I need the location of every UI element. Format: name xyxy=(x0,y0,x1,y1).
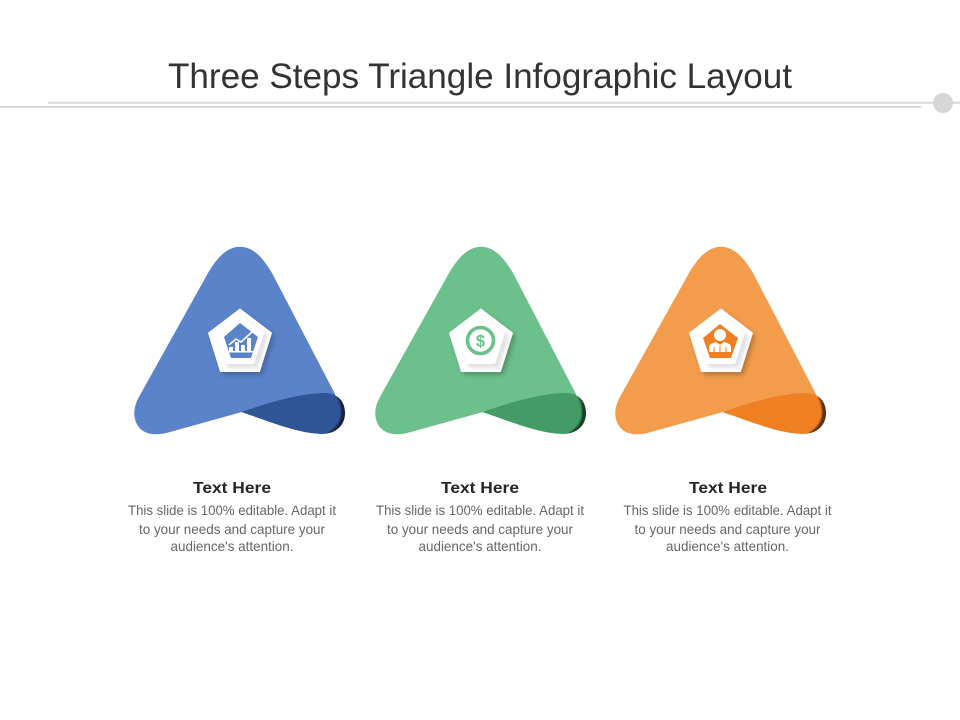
panel: step 2 green triangle xyxy=(375,247,589,436)
text block: step 2: Text Here xyxy=(441,480,519,497)
text block: step 1 xyxy=(128,480,336,554)
text block: step 2: This slide is 100% editable. Adapt it xyxy=(376,502,584,518)
fold xyxy=(241,392,348,436)
pentagon badge xyxy=(208,309,274,375)
text block: step 2 xyxy=(376,480,584,554)
text block: step 3: This slide is 100% editable. Adapt it xyxy=(624,502,832,518)
pentagon badge xyxy=(690,309,756,375)
text block: step 3: to your needs and capture your xyxy=(634,521,821,537)
pentagon badge xyxy=(450,309,516,375)
triangle body xyxy=(375,247,581,434)
text block: step 2: audience's attention. xyxy=(418,538,542,554)
panel: step 1 blue triangle xyxy=(134,247,348,436)
text block: step 1: to your needs and capture your xyxy=(139,521,325,537)
icon: person in pentagon xyxy=(703,324,738,358)
fold xyxy=(722,392,829,436)
title: Three Steps Triangle Infographic Layout xyxy=(168,57,792,96)
triangle body xyxy=(134,247,340,434)
panel: step 3 orange triangle xyxy=(615,247,829,436)
text block: step 1: Text Here xyxy=(193,480,271,497)
icon: chart in pentagon xyxy=(224,323,258,358)
fold xyxy=(482,392,589,436)
text block: step 3: audience's attention. xyxy=(666,538,789,554)
text block: step 3 xyxy=(624,480,832,554)
text block: step 1: This slide is 100% editable. Adapt it xyxy=(128,502,336,518)
icon: dollar coin: $ xyxy=(476,332,485,350)
header rule with circle xyxy=(0,93,960,113)
text block: step 3: Text Here xyxy=(689,480,767,497)
text block: step 2: to your needs and capture your xyxy=(387,521,573,537)
text block: step 1: audience's attention. xyxy=(170,538,294,554)
triangle body xyxy=(615,247,821,434)
